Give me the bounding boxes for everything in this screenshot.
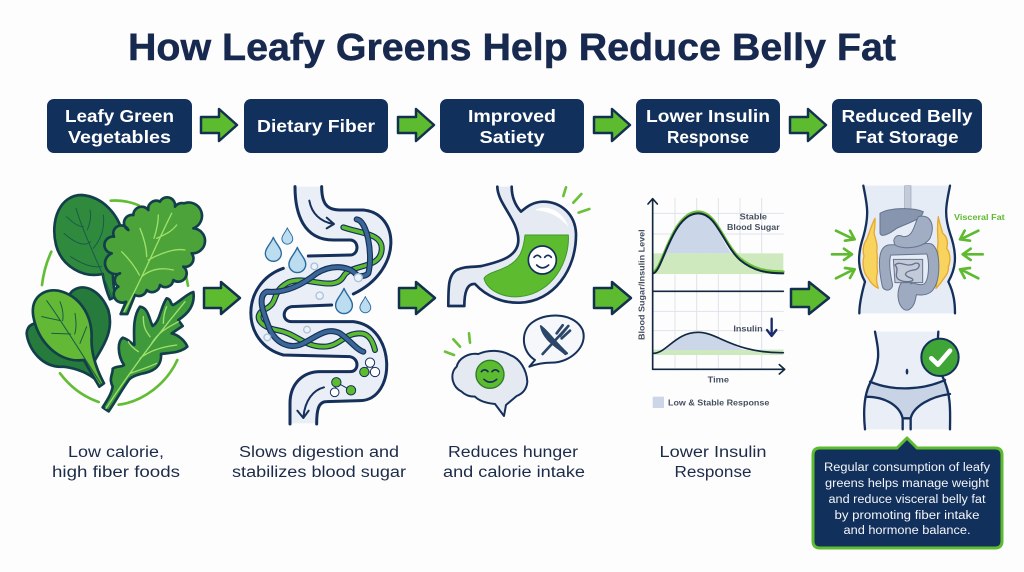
tract fill (251, 187, 391, 423)
caption: fiber: Slows digestion and (239, 444, 399, 461)
chart labels: Blood Sugar/Insulin Level (636, 229, 646, 340)
speech bubble with cutlery (524, 315, 584, 367)
caption: leafy greens: high fiber foods (52, 464, 180, 481)
caption: leafy greens (52, 444, 180, 481)
flow arrows (297, 201, 334, 418)
chart labels: Time (708, 374, 729, 384)
caption: satiety: Reduces hunger (448, 444, 578, 461)
caption: satiety: and calorie intake (443, 464, 585, 481)
spinach leaf top (54, 195, 123, 299)
caption: leafy greens: Low calorie, (68, 444, 164, 461)
brain (452, 351, 527, 416)
step 5 header (832, 99, 982, 153)
callout: greens helps manage weight (825, 478, 990, 490)
brain rays (445, 333, 470, 355)
step 3 header: Improved (468, 106, 556, 126)
dashed ring (42, 201, 188, 405)
step 5 header: Fat Storage (856, 127, 959, 147)
icon: stomach and brain (445, 187, 589, 416)
caption: fiber: stabilizes blood sugar (232, 464, 406, 481)
kale leaf (104, 197, 205, 314)
down arrow (767, 319, 776, 336)
area under curves (653, 213, 745, 353)
arrow: leaves to fiber (204, 282, 240, 314)
stomach (448, 187, 576, 306)
chart: blood sugar and insulin response (636, 198, 785, 408)
chart labels (636, 211, 780, 384)
step 5 header: Reduced Belly (842, 106, 973, 126)
visceral fat label: Visceral Fat (954, 213, 1005, 222)
step 3 header (440, 99, 584, 153)
caption: fiber (232, 444, 406, 481)
callout: and hormone balance. (844, 525, 970, 537)
step 4 header (636, 99, 780, 153)
flow header row (47, 99, 982, 153)
caption: satiety (443, 444, 585, 481)
spinach back leaf (27, 287, 110, 383)
callout (813, 438, 1002, 548)
title: How Leafy Greens Help Reduce Belly Fat (128, 27, 896, 69)
stomach rays (563, 187, 589, 213)
torso with visceral fat (859, 186, 955, 313)
arrow: fiber to satiety (399, 282, 435, 314)
caption: insulin (660, 444, 766, 481)
caption: insulin: Response (674, 464, 752, 481)
step 4 header: Lower Insulin (646, 106, 770, 126)
step 2 header: Dietary Fiber (257, 116, 375, 136)
step 1 header (47, 99, 192, 153)
insulin curve (653, 332, 783, 353)
callout: Regular consumption of leafy (824, 462, 990, 474)
compression arrows (832, 231, 983, 278)
chart labels: Stable (740, 211, 767, 221)
caption: insulin: Lower Insulin (660, 444, 766, 461)
check badge (921, 339, 959, 376)
icon: digestive tract with fiber (251, 187, 391, 424)
arugula leaf (103, 292, 194, 411)
chart labels: Blood Sugar (727, 222, 780, 232)
bubbles (264, 263, 362, 341)
legend: Low & Stable Response (668, 398, 770, 408)
chart labels: Insulin (733, 324, 763, 334)
blue fiber strand (262, 219, 370, 352)
axes (648, 199, 785, 374)
arrow 4 (790, 109, 826, 141)
arrow 3 (594, 109, 630, 141)
step 4 header: Response (667, 127, 749, 147)
arrow: insulin to belly fat (791, 282, 829, 314)
arrow: satiety to insulin (594, 282, 631, 314)
nutrient molecules (330, 358, 380, 397)
arrow 2 (398, 109, 434, 141)
callout: and reduce visceral belly fat (828, 494, 986, 506)
icon: abdomen and waist (832, 186, 1005, 429)
step 3 header: Satiety (480, 127, 545, 147)
callout: by promoting fiber intake (834, 510, 980, 522)
arrow 1 (201, 109, 237, 141)
tract walls (251, 187, 391, 424)
blood sugar curve (653, 212, 783, 273)
water droplets (265, 228, 371, 314)
spinach front leaf (33, 290, 104, 387)
step 2 header (244, 99, 388, 153)
step 1 header: Leafy Green (65, 106, 174, 126)
step 1 header: Vegetables (68, 127, 171, 147)
green target bands (653, 253, 783, 355)
slim waist (864, 332, 950, 429)
icon: leafy greens (27, 195, 205, 411)
green fiber strand (259, 227, 382, 350)
